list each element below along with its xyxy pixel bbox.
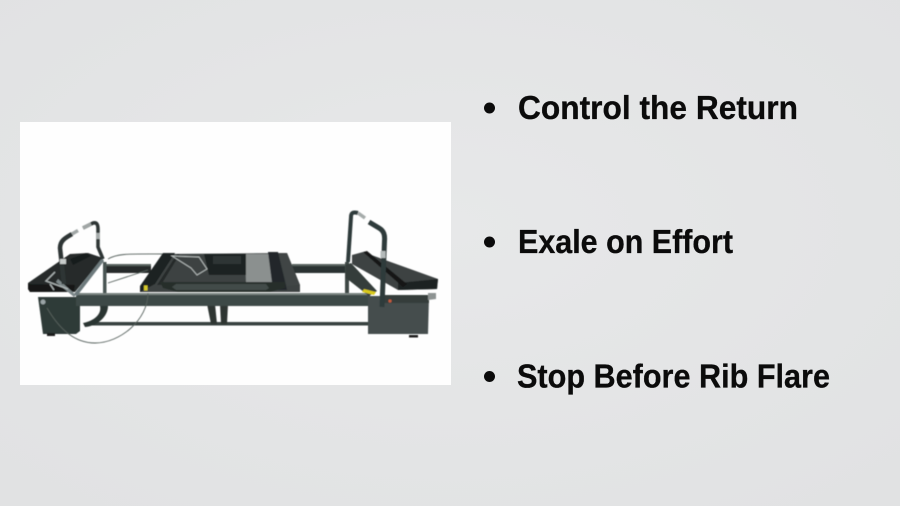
right handle bars <box>348 212 358 262</box>
bullet item: Exale on Effort <box>484 223 733 260</box>
panel: product photo of pilates reformer <box>20 122 451 385</box>
carriage front tube <box>160 282 285 292</box>
lower rail <box>90 322 370 326</box>
bullet dot <box>484 236 495 248</box>
label: Stop Before Rib Flare <box>517 358 830 394</box>
cables <box>47 254 170 343</box>
bullet item: Stop Before Rib Flare <box>484 358 830 394</box>
label: Exale on Effort <box>518 223 733 260</box>
left rear post <box>103 262 106 294</box>
centre legs <box>207 304 228 324</box>
right platform <box>352 252 438 290</box>
rear rail right <box>292 264 348 273</box>
bullet item: Control the Return <box>484 89 798 126</box>
left clamps and cable loops <box>46 272 68 290</box>
right end frame <box>346 263 377 296</box>
main side rail <box>76 293 370 306</box>
left handle bars <box>60 234 72 284</box>
bullet dot <box>484 371 495 382</box>
left platform <box>28 253 103 292</box>
carriage left bolster <box>140 253 175 292</box>
label: Control the Return <box>518 89 798 126</box>
left frame band <box>74 258 104 296</box>
headrest and shoulder blocks <box>204 254 246 275</box>
illustration: reformer machine <box>28 212 438 343</box>
carriage light cushion <box>245 254 278 282</box>
right box <box>368 296 429 334</box>
bullet dot <box>484 102 495 114</box>
carriage base <box>140 253 300 292</box>
carriage right bolster <box>268 252 287 290</box>
centre loops of cable <box>172 256 207 275</box>
right rear post <box>345 262 349 294</box>
left curved foot <box>83 306 108 327</box>
rear rail left <box>103 264 151 273</box>
second left strap <box>157 254 180 285</box>
left box <box>38 297 80 334</box>
right cushion end <box>278 253 300 286</box>
